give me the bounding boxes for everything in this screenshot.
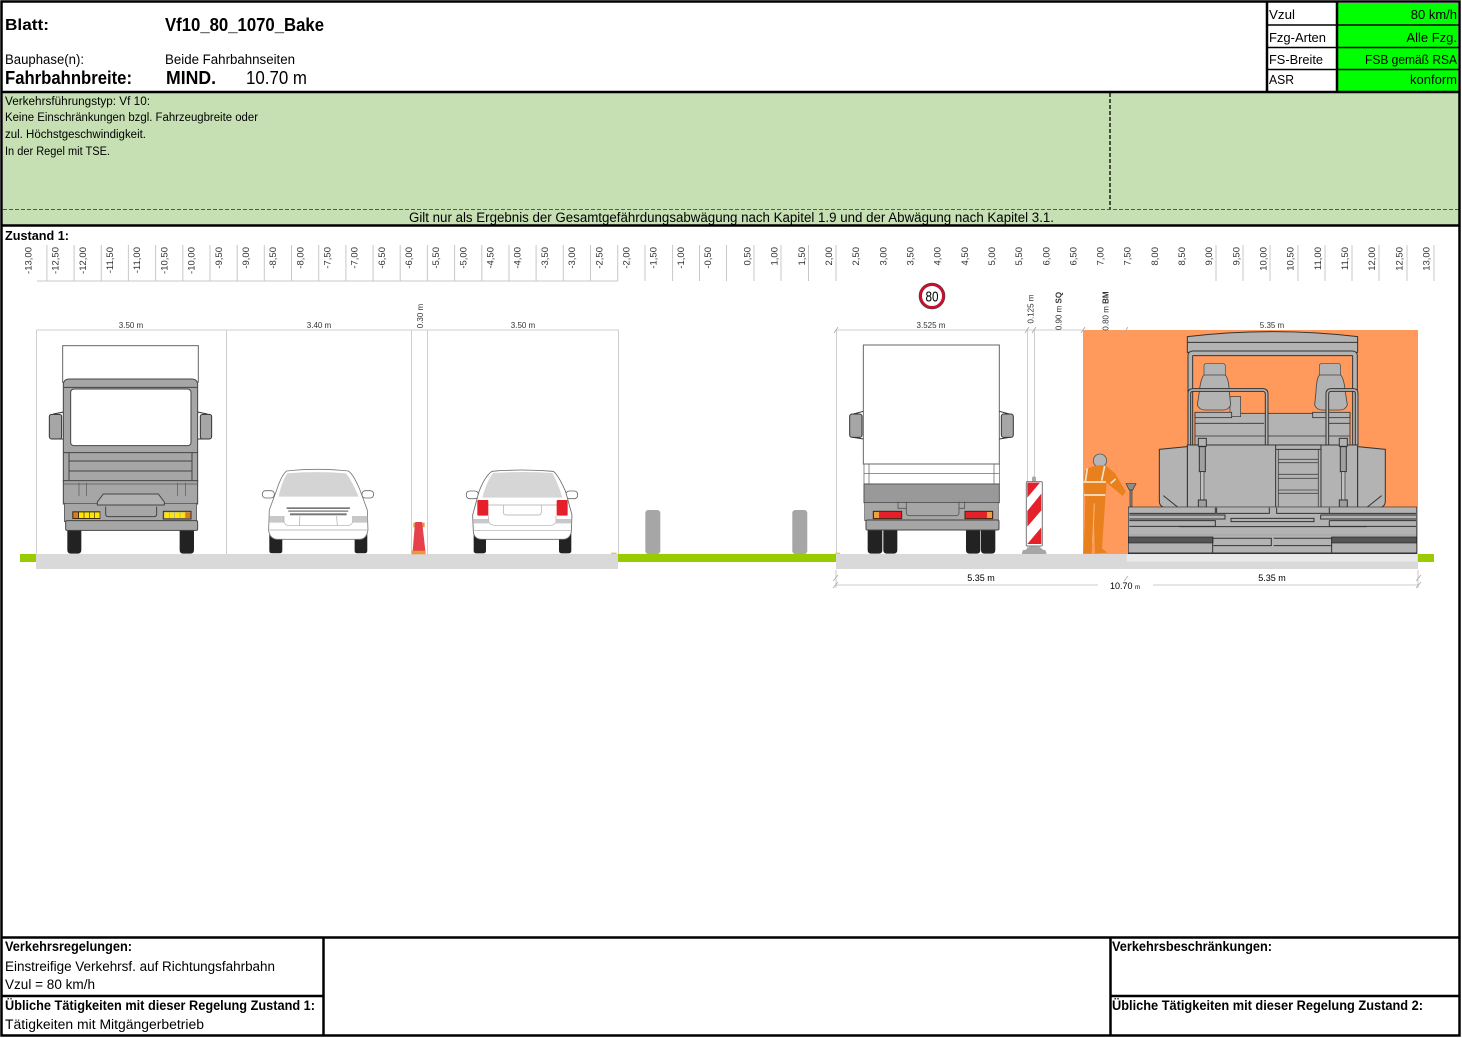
scale: station ruler: 9,50 [1231, 247, 1242, 266]
dimension labels top: 0.30 m [416, 303, 425, 328]
scale: station ruler: -8,00 [295, 247, 306, 269]
carriageway width: 10.70 m [246, 68, 307, 88]
scale: station ruler: -2,50 [594, 247, 605, 269]
icon: speed limit sign 80 [919, 283, 945, 309]
dimension labels top: 3.50 m [119, 321, 144, 330]
scale: station ruler: 5,50 [1014, 247, 1025, 266]
icon: road worker [1083, 454, 1126, 554]
scale: station ruler: -8,50 [268, 247, 279, 269]
vehicle: car rear view [466, 470, 578, 553]
work zone: orange area [1083, 330, 1418, 554]
vehicle: truck front view [49, 346, 212, 554]
table: parameters: FS-Breite [1269, 52, 1323, 67]
scale: station ruler: 8,50 [1177, 247, 1188, 266]
panel: header [5, 15, 324, 88]
sheet title [5, 15, 324, 35]
footer right: traffic restrictions: Übliche Tätigkeiten mit dieser Regelung Zustand 2: [1112, 998, 1423, 1013]
footer left: traffic rules: Verkehrsregelungen: [5, 939, 132, 954]
construction phase: Beide Fahrbahnseiten [165, 52, 295, 67]
vehicle: car front view [262, 469, 374, 553]
dimension lines bottom [833, 570, 1421, 591]
carriageway width: Fahrbahnbreite: [5, 68, 132, 88]
scale: station ruler: -3,00 [567, 247, 578, 269]
scale: station ruler: -12,00 [78, 247, 89, 274]
scale: station ruler: 11,00 [1313, 247, 1324, 270]
scale: station ruler: -11,00 [132, 247, 143, 273]
scale: station ruler: -7,00 [350, 247, 361, 269]
scale: station ruler: 3,50 [906, 247, 916, 266]
sheet title: Blatt: [5, 17, 49, 34]
scale: station ruler: -5,00 [458, 247, 469, 269]
roadway right [836, 554, 1418, 569]
table: parameters: 80 km/h [1411, 7, 1457, 22]
scale: station ruler: -2,00 [622, 247, 632, 269]
scale: station ruler: 3,00 [878, 247, 889, 266]
vehicle: road paver [1126, 332, 1417, 562]
dimension labels top: 0.90 m SQ [1054, 292, 1064, 330]
panel: traffic routing description: In der Regel mit TSE. [5, 146, 110, 158]
scale: station ruler: -7,50 [322, 247, 334, 269]
scale: station ruler: -9,50 [214, 247, 225, 269]
dimension labels top: 0.80 m BM [1102, 291, 1110, 331]
median posts [611, 510, 840, 554]
scale: station ruler: 8,00 [1150, 247, 1161, 266]
scale: station ruler: -9,00 [241, 247, 252, 269]
carriageway width: MIND. [166, 68, 216, 88]
scale: station ruler: 1,00 [770, 247, 781, 266]
dimension lines bottom: 5.35 m [967, 573, 995, 583]
dimension labels top: 3.525 m [917, 321, 946, 330]
scale: station ruler: -10,50 [159, 247, 170, 274]
construction phase: Bauphase(n): [5, 52, 84, 67]
icon: traffic cone [412, 522, 426, 554]
scale: station ruler: 11,50 [1340, 247, 1351, 270]
dimension labels top: 3.50 m [511, 321, 536, 330]
scale: station ruler: -10,00 [187, 247, 198, 274]
vehicle: truck rear view [850, 345, 1013, 554]
panel: traffic routing description: Keine Einschränkungen bzgl. Fahrzeugbreite oder [5, 112, 258, 124]
icon: warning beacon [1022, 476, 1047, 554]
scale: station ruler: -4,50 [486, 247, 497, 269]
scale: station ruler: -6,50 [377, 247, 388, 269]
dimension lines bottom: 10.70 m [1110, 581, 1140, 591]
scale: station ruler: 12,00 [1367, 247, 1378, 271]
table: parameters: ASR [1269, 72, 1294, 87]
table: parameters [1267, 2, 1459, 91]
panel: footer [5, 939, 1423, 1032]
scale: station ruler: 9,00 [1204, 247, 1215, 266]
scale: station ruler: -1,00 [676, 247, 687, 269]
scale: station ruler: -12,50 [51, 247, 62, 274]
sheet title: Vf10_80_1070_Bake [165, 15, 324, 35]
scale: station ruler: 12,50 [1394, 247, 1405, 271]
panel: traffic routing description [3, 93, 1459, 225]
table: parameters: FSB gemäß RSA [1365, 52, 1457, 67]
panel: traffic routing description: zul. Höchstgeschwindigkeit. [5, 129, 146, 141]
footer left: traffic rules: Vzul = 80 km/h [5, 977, 95, 992]
lane grid lines [36, 330, 1083, 554]
dimension labels top: 3.40 m [307, 321, 332, 330]
scale: station ruler: 2,00 [824, 247, 835, 266]
roadway left [36, 554, 618, 569]
table: parameters: Vzul [1269, 7, 1295, 22]
scale: station ruler: -5,50 [431, 247, 442, 269]
carriageway width [5, 68, 307, 88]
table: parameters: Alle Fzg. [1406, 30, 1457, 45]
panel: traffic routing description: Gilt nur als Ergebnis der Gesamtgefährdungsabwägung nach Kapitel 1.9 und der Abwägung nach Kapitel 3.1. [409, 210, 1054, 225]
scale: station ruler: 7,00 [1096, 247, 1107, 266]
scale: station ruler: -13,00 [24, 247, 34, 274]
panel: traffic routing description: Verkehrsführungstyp: Vf 10: [5, 96, 150, 108]
construction phase [5, 52, 295, 67]
scale: station ruler: 13,00 [1422, 247, 1432, 271]
scale: station ruler: -11,50 [105, 247, 116, 273]
footer left: traffic rules: Übliche Tätigkeiten mit dieser Regelung Zustand 1: [5, 998, 315, 1013]
footer right: traffic restrictions [1112, 939, 1423, 1013]
table: parameters: Fzg-Arten [1269, 30, 1326, 45]
dimension labels top: 0.125 m [1026, 294, 1036, 323]
scale: station ruler: 7,50 [1123, 247, 1134, 266]
scale: station ruler: 1,50 [797, 247, 808, 266]
scale: station ruler [24, 245, 1434, 281]
scale: station ruler: 0,50 [742, 247, 754, 266]
footer left: traffic rules: Tätigkeiten mit Mitgängerbetrieb [5, 1017, 204, 1032]
scale: station ruler: 5,00 [987, 247, 998, 266]
scale: station ruler: 4,50 [960, 247, 971, 266]
scale: station ruler: 4,00 [933, 247, 944, 266]
footer left: traffic rules [5, 939, 315, 1032]
scale: station ruler: -1,50 [649, 247, 660, 269]
dimension lines bottom: 5.35 m [1258, 573, 1286, 583]
scale: station ruler: -3,50 [540, 247, 551, 269]
footer left: traffic rules: Einstreifige Verkehrsf. auf Richtungsfahrbahn [5, 959, 275, 974]
scale: station ruler: -0,50 [703, 247, 714, 269]
dimension labels top: 5.35 m [1260, 321, 1285, 330]
heading: Zustand 1: Zustand 1: [5, 228, 69, 243]
dimension labels top [119, 291, 1285, 333]
scale: station ruler: 10,50 [1286, 247, 1297, 271]
scale: station ruler: 2,50 [851, 247, 862, 266]
scale: station ruler: 6,50 [1068, 247, 1079, 266]
icon: speed limit sign 80: 80 [926, 288, 938, 306]
scale: station ruler: -6,00 [404, 247, 415, 269]
scale: station ruler: 6,00 [1041, 247, 1052, 266]
table: parameters: konform [1410, 72, 1457, 87]
green verge [20, 554, 1434, 562]
scale: station ruler: -4,00 [513, 247, 524, 269]
footer right: traffic restrictions: Verkehrsbeschränkungen: [1112, 939, 1272, 954]
scale: station ruler: 10,00 [1258, 247, 1270, 271]
